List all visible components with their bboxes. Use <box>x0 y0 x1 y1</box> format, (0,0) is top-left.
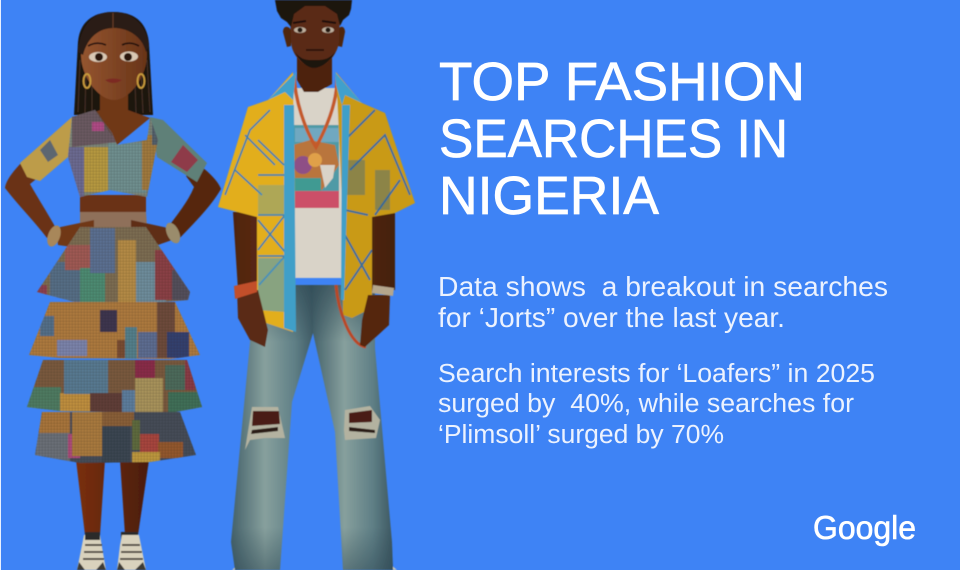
title <box>439 52 805 226</box>
beard <box>295 52 335 68</box>
neck and chest <box>95 90 150 145</box>
arms <box>5 160 57 238</box>
sneakers <box>77 532 146 570</box>
crop top bodice <box>68 109 158 198</box>
sneakers <box>232 563 397 570</box>
title: NIGERIA <box>439 166 659 226</box>
t-shirt <box>293 88 343 278</box>
skirt tier 2 <box>25 300 205 360</box>
eyes <box>89 52 107 62</box>
title: TOP FASHION <box>439 52 805 112</box>
text block: loafers and plimsoll: Search interests for ‘Loafers” in 2025 <box>438 360 875 388</box>
crop top sleeves <box>20 117 72 181</box>
skirt tier 4 <box>30 410 200 465</box>
lips <box>105 78 122 83</box>
afro hair <box>275 0 352 27</box>
skirt tier 1 <box>36 226 191 303</box>
eyes and brows <box>294 27 306 33</box>
hair braids <box>74 12 153 115</box>
necklace <box>97 112 112 135</box>
legs <box>76 460 149 535</box>
google logo: Google <box>813 509 916 546</box>
text block: loafers and plimsoll <box>438 360 875 449</box>
neck <box>297 57 332 92</box>
ears <box>283 27 345 47</box>
shirt left panel <box>218 72 295 332</box>
text block: jorts breakout: Data shows a breakout in searches <box>438 271 888 302</box>
midriff <box>80 195 146 212</box>
earrings <box>84 74 90 88</box>
beaded bracelets <box>234 281 257 299</box>
title: SEARCHES IN <box>439 109 788 169</box>
right knee rip <box>344 406 380 440</box>
figure: woman in patchwork outfit <box>5 12 221 570</box>
long bead chain <box>336 285 366 347</box>
figure: man in yellow shirt and ripped jeans <box>218 0 415 570</box>
text block: jorts breakout: for ‘Jorts” over the last year. <box>438 302 785 333</box>
text block: jorts breakout <box>438 271 888 333</box>
hands and bracelets <box>45 220 183 248</box>
hands <box>237 290 268 347</box>
ripped jeans <box>231 285 393 570</box>
text block: loafers and plimsoll: surged by 40%, while searches for <box>438 390 855 418</box>
teal plackets and collar <box>284 105 350 332</box>
bead necklace <box>294 75 337 147</box>
arms <box>233 212 395 290</box>
face <box>290 5 340 68</box>
mouth <box>306 49 324 51</box>
face <box>81 27 147 100</box>
shirt right panel <box>336 72 415 318</box>
left knee rip <box>245 407 285 450</box>
t-shirt graphic <box>293 125 340 208</box>
skirt waistband <box>80 212 147 227</box>
text block: loafers and plimsoll: ‘Plimsoll’ surged by 70% <box>438 421 724 449</box>
skirt tier 3 <box>25 358 205 414</box>
